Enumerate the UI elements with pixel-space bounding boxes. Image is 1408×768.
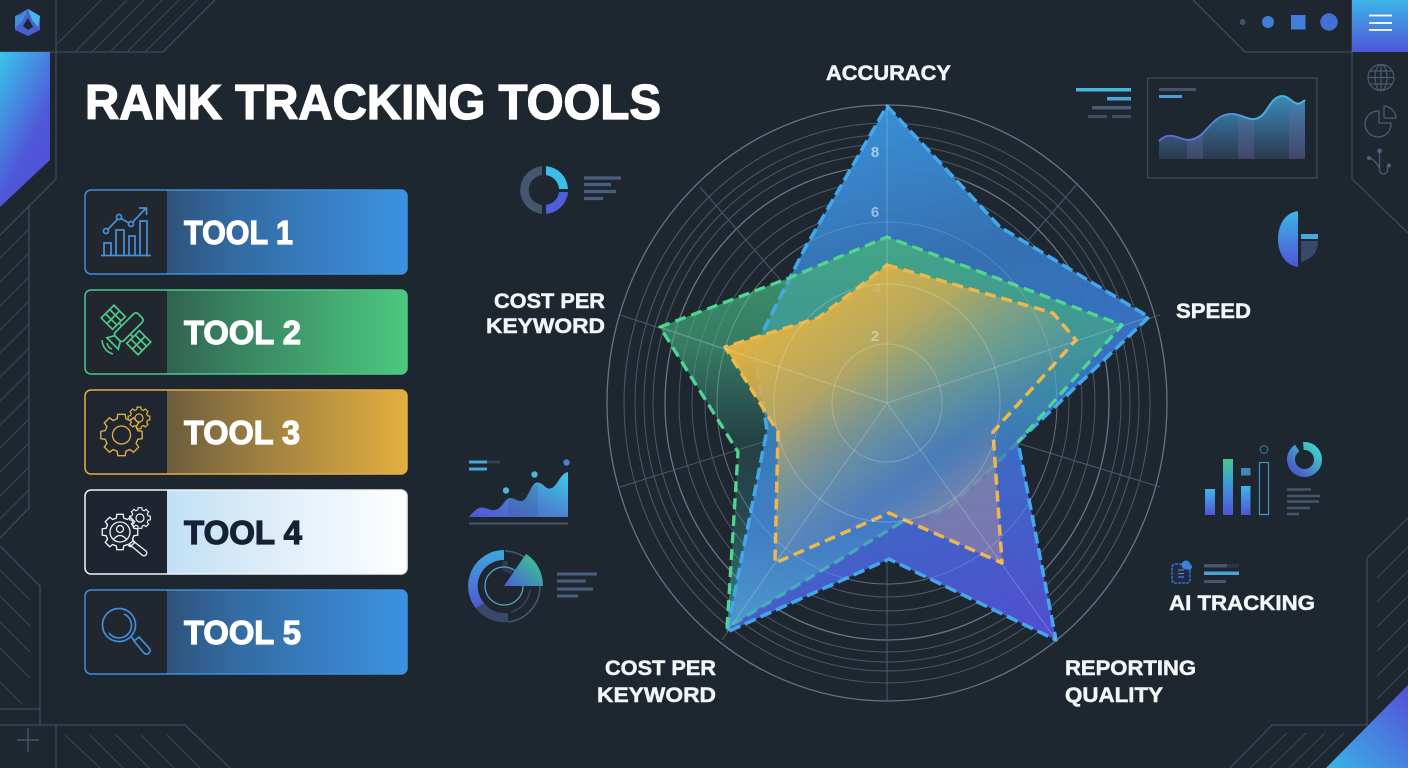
mini text bars: top right bbox=[1076, 88, 1131, 118]
series: tool 2 (green) outline bbox=[660, 237, 1122, 628]
axis label: cost per keyword (upper): KEYWORD bbox=[486, 315, 605, 338]
axis label: reporting quality: REPORTING bbox=[1065, 657, 1196, 680]
axis label: accuracy: ACCURACY bbox=[826, 62, 951, 85]
series: tool 1 (blue) fill bbox=[727, 106, 1149, 640]
axis scale numbers: 6 bbox=[871, 204, 879, 221]
title: RANK TRACKING TOOLS bbox=[85, 76, 661, 130]
menu button bbox=[1352, 0, 1408, 52]
icon: branch bbox=[1368, 149, 1390, 174]
label: tool 2: TOOL 2 bbox=[184, 314, 301, 351]
icon: gears bbox=[101, 407, 150, 456]
mini bar chart with donut: right bbox=[1205, 445, 1320, 515]
icon: satellite bbox=[94, 297, 159, 362]
icon: magnifier bbox=[102, 608, 150, 654]
axis scale numbers: 2 bbox=[871, 328, 879, 345]
axis scale numbers bbox=[871, 144, 882, 345]
legend card: tool 2 bbox=[85, 290, 407, 374]
axis label: reporting quality: QUALITY bbox=[1065, 684, 1163, 707]
axis label: cost per keyword (lower): KEYWORD bbox=[597, 684, 716, 707]
icon: logo bbox=[15, 9, 40, 36]
axis scale numbers: 4 bbox=[873, 280, 882, 297]
legend card: tool 5 bbox=[85, 590, 407, 674]
axis label: cost per keyword (upper): COST PER bbox=[494, 290, 605, 313]
corner accent: top left bbox=[0, 52, 50, 207]
mini pie glyph bbox=[1278, 211, 1318, 267]
icon: pie bbox=[1365, 106, 1396, 137]
icon: ai chip with text bars bbox=[1172, 560, 1239, 583]
mini area chart: left bbox=[469, 459, 570, 524]
series: tool 2 (green) fill bbox=[660, 237, 1122, 632]
axis label: speed: SPEED bbox=[1176, 300, 1251, 323]
label: tool 3: TOOL 3 bbox=[184, 414, 300, 451]
mini donut: top left bbox=[520, 166, 621, 214]
label: tool 5: TOOL 5 bbox=[184, 614, 301, 651]
axis label: ai tracking: AI TRACKING bbox=[1169, 592, 1315, 615]
corner accent: bottom right bbox=[1326, 685, 1408, 768]
icon: plus marker bbox=[17, 728, 39, 752]
legend card: tool 4 bbox=[85, 490, 407, 574]
mini donut chart with wedge: left bbox=[468, 550, 597, 622]
top right shapes bbox=[1240, 13, 1338, 31]
radar chart bbox=[607, 105, 1167, 701]
area chart panel bbox=[1148, 78, 1317, 178]
label: tool 4: TOOL 4 bbox=[184, 514, 303, 551]
legend card: tool 1 bbox=[85, 190, 407, 274]
radar inner grid overlay bbox=[660, 106, 1149, 640]
legend card: tool 3 bbox=[85, 390, 407, 474]
label: tool 1: TOOL 1 bbox=[184, 214, 293, 251]
series: tool 1 (blue) outline bbox=[727, 106, 1149, 640]
axis scale numbers: 8 bbox=[871, 144, 879, 161]
series: tool 3 (yellow) bbox=[725, 265, 1076, 563]
icon: globe bbox=[1368, 64, 1394, 90]
radar grid bbox=[607, 105, 1167, 701]
icon: bar chart with trend bbox=[101, 208, 151, 256]
axis label: cost per keyword (lower): COST PER bbox=[605, 657, 716, 680]
icon: gears with person and magnifier bbox=[102, 508, 150, 556]
